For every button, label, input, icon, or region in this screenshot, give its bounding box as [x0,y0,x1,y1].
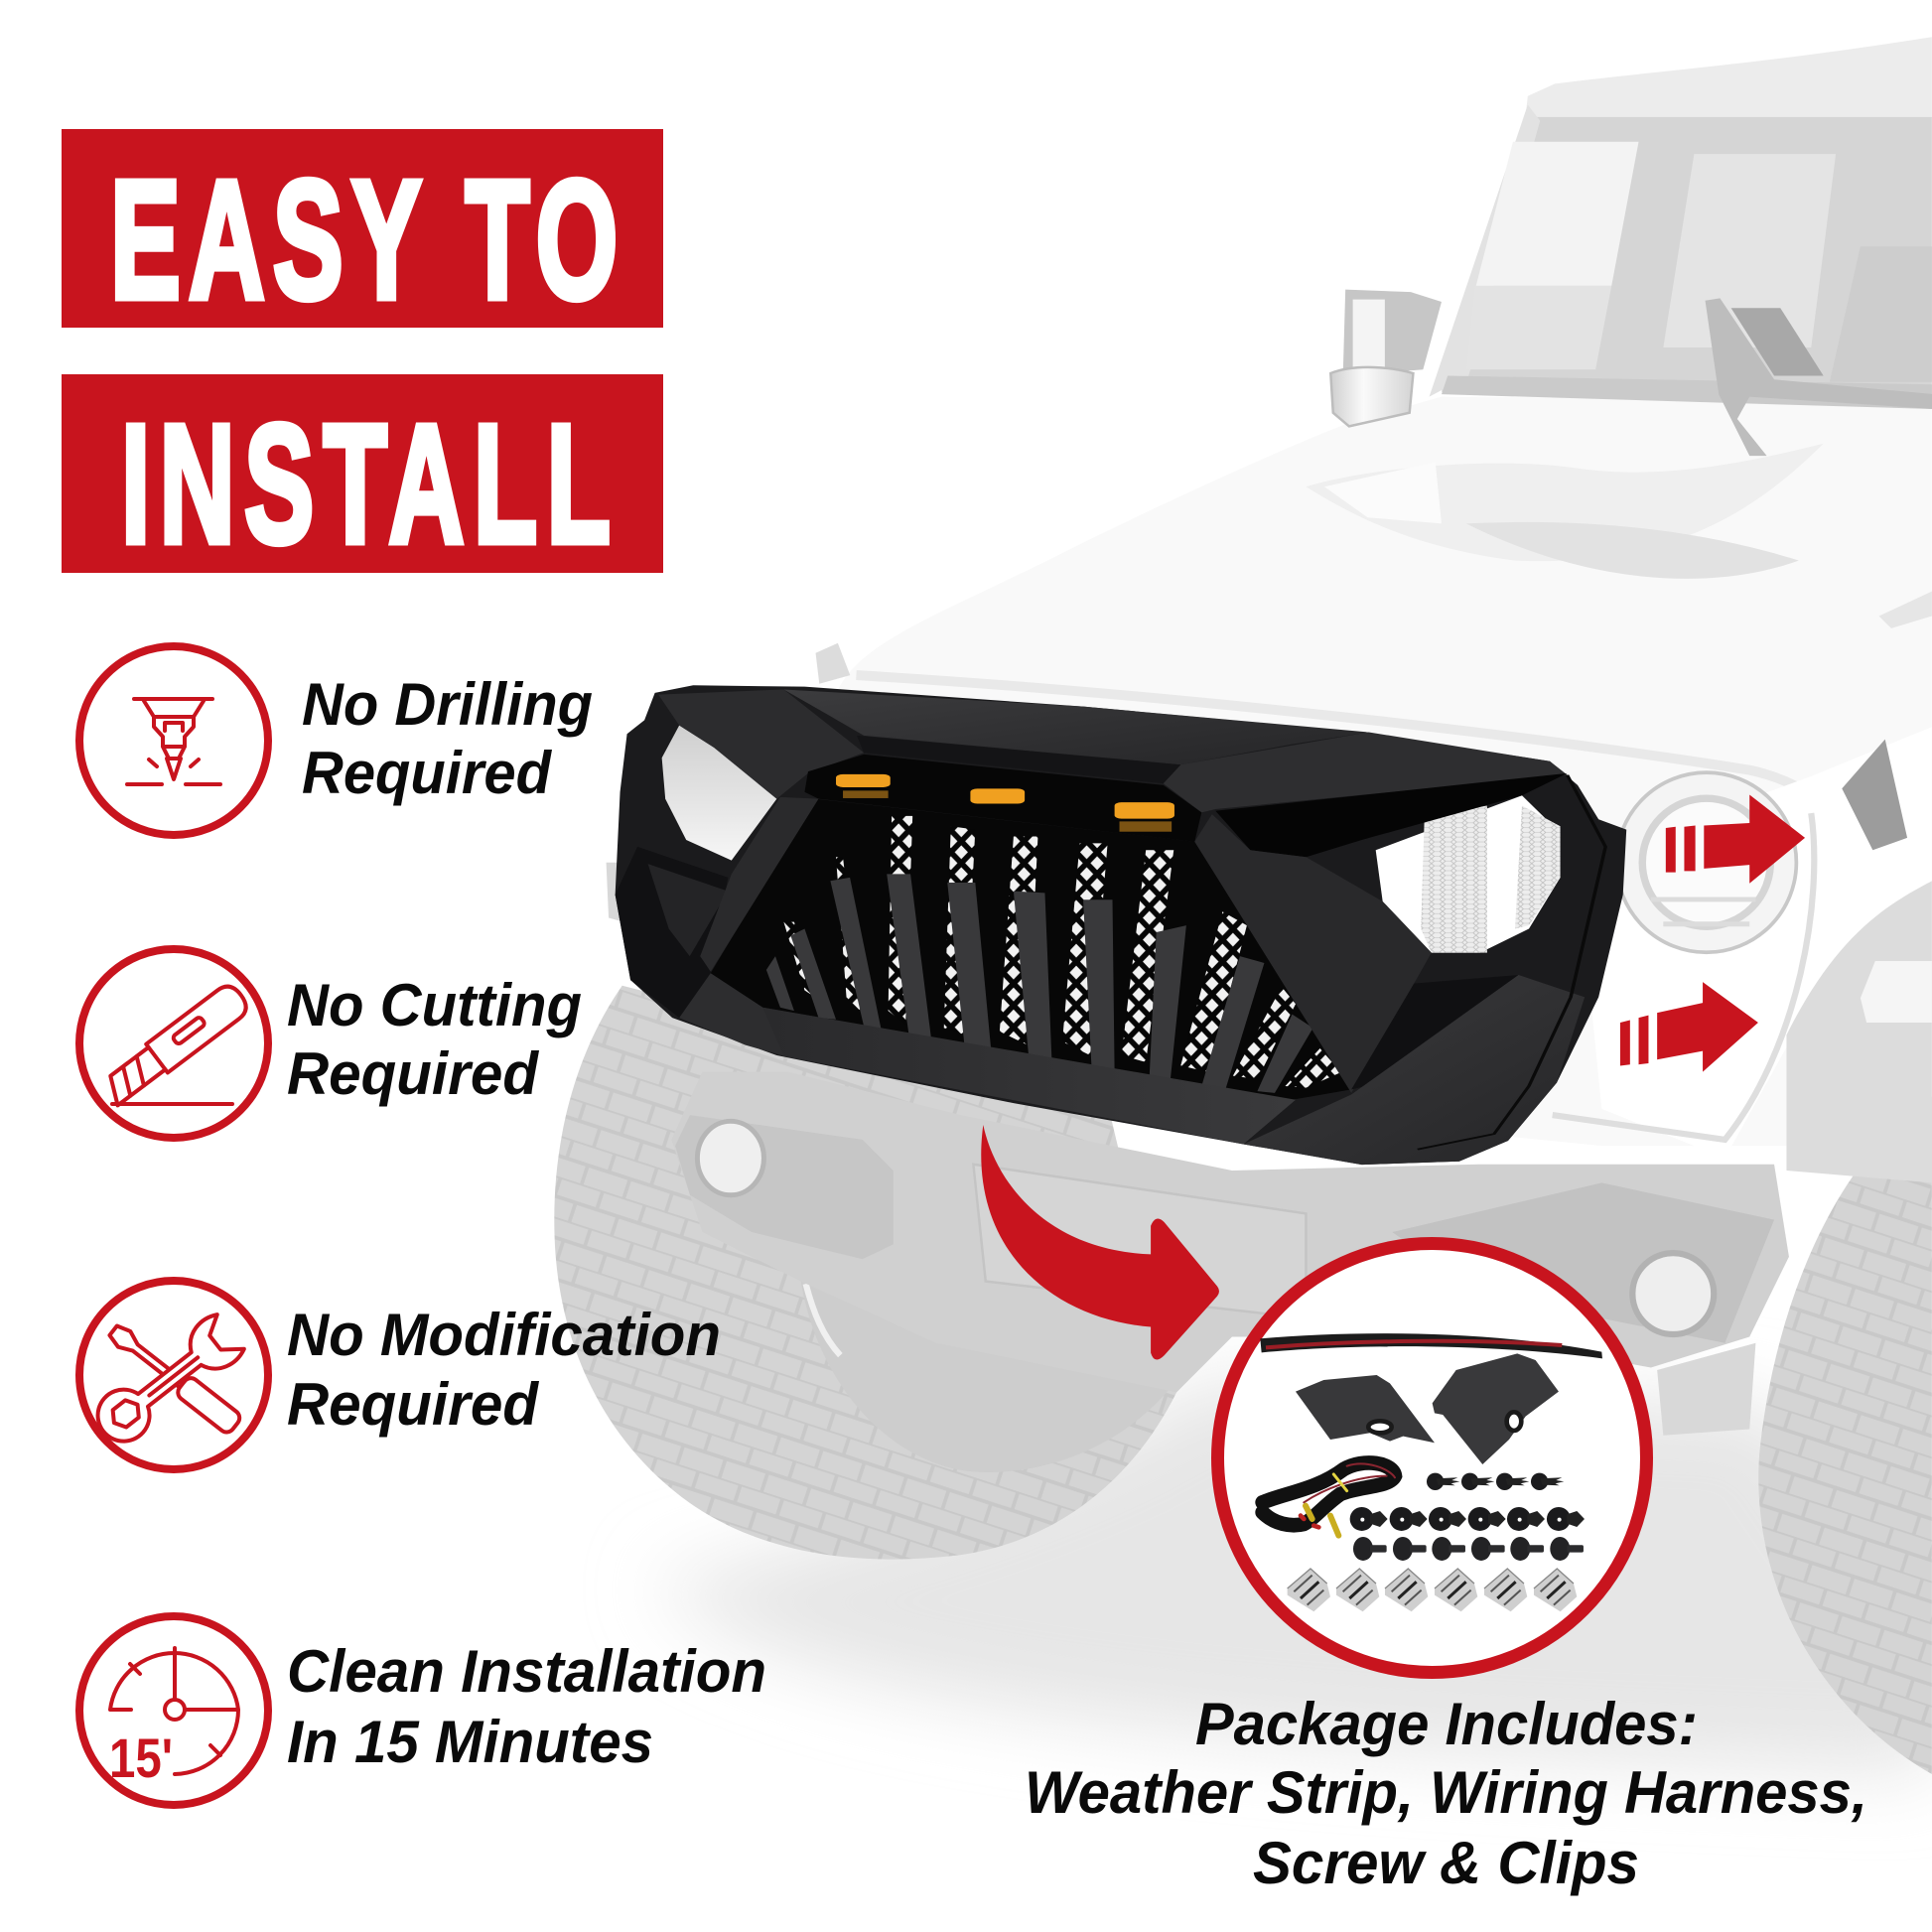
upper right shadow [1215,773,1568,857]
right grille backdrop [1417,838,1553,949]
feature: clean installation [79,1616,766,1805]
label: Clean Installation [287,1638,766,1705]
left side panel [616,847,728,1018]
label [287,972,582,1107]
headlight [1616,772,1796,952]
ground shadow [653,1380,1932,1774]
amber lights [836,774,1174,832]
right fog lamp [1632,1253,1714,1334]
right corner flap [1433,1353,1559,1464]
rivet pins [1353,1537,1584,1561]
metal clips [1288,1569,1577,1611]
left flap hole [1368,1421,1392,1433]
push rivets [1350,1507,1585,1531]
arrow: to upper headlight mount [1666,794,1805,884]
right flap hole [1507,1412,1521,1431]
label: Required [302,740,552,806]
hood and body [816,397,1932,1146]
upper left wing [658,689,864,799]
arrow: to lower headlight mount [1620,982,1758,1072]
front bumper [671,1072,1789,1436]
rim highlights [1418,775,1605,1150]
package includes caption [1025,1691,1867,1896]
lower mouth bar [762,1008,1296,1144]
grille product [616,685,1626,1165]
screws [1427,1473,1564,1490]
label [302,671,593,806]
vertical bars [766,874,1313,1093]
left diagonal brace [700,797,818,972]
mesh strips [783,816,1341,1088]
right lower recess [1351,975,1518,1089]
right eye opening [1376,795,1561,953]
windshield and roof [1430,37,1932,456]
icon: clock: 15' [109,1726,173,1789]
side mirror [1330,290,1442,426]
label: No Modification [287,1302,721,1368]
right lower panel [1243,975,1585,1165]
package includes caption: Screw & Clips [1253,1830,1639,1896]
front fender and right side [1553,727,1932,1182]
left eye opening [662,726,776,861]
icon: utility knife [79,949,268,1138]
centre ridge [857,736,1180,783]
feature: no modification [79,1281,721,1469]
package contents circle [1217,1243,1646,1672]
faded jeep photograph [554,37,1932,1774]
upper right wing [1164,732,1568,812]
label: Required [287,1371,539,1438]
mouth opening [711,799,1351,1100]
title banner: easy to: EASY TO [110,147,625,335]
feature: no cutting [79,949,582,1138]
label: Required [287,1040,539,1107]
arrow: to package contents [981,1125,1219,1360]
grille frame [616,685,1626,1165]
package includes caption: Weather Strip, Wiring Harness, [1025,1759,1867,1826]
feature: no drilling [79,646,593,835]
icon: crossed tools [79,1281,268,1469]
left corner flap [1296,1375,1435,1443]
title banner: install: INSTALL [121,389,620,578]
left tire [554,986,1176,1560]
left fog lamp [697,1121,763,1195]
right diagonal brace [1194,814,1432,1093]
weather strip [1260,1333,1602,1358]
left side facet [648,864,728,956]
wiring harness [1263,1462,1395,1536]
light housing [804,755,1201,842]
package includes caption: Package Includes: [1195,1691,1698,1757]
label [287,1638,766,1775]
top centre panel [783,689,1369,764]
right tire [1758,1096,1932,1774]
label: In 15 Minutes [287,1709,653,1775]
label: No Cutting [287,972,582,1038]
left bumper end cap [607,863,622,921]
label: No Drilling [302,671,593,738]
icon: drill [79,646,268,835]
lower left panel [679,956,783,1056]
label [287,1302,721,1438]
icon: clock [79,1616,268,1805]
